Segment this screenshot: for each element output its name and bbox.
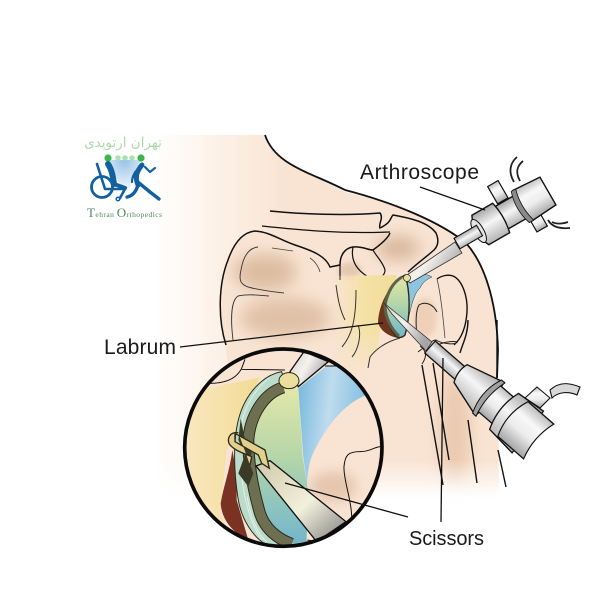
- tear in labrum: [238, 418, 253, 487]
- shoulder arthroscopy illustration: [85, 134, 581, 548]
- magnified inset circle: [180, 343, 387, 550]
- logo dots: [104, 154, 145, 162]
- skin incision around instrument: [418, 340, 458, 364]
- green disk: [251, 385, 307, 544]
- cables: [510, 157, 570, 228]
- fade at bottom of arm: [150, 460, 520, 500]
- logo English name: Tehran Orthopedics: [87, 205, 162, 220]
- scissors cable: [550, 384, 580, 398]
- label: Scissors: Scissors: [409, 528, 484, 550]
- logo Persian title: تهران ارتوپدی: [84, 135, 162, 151]
- scissors blades: [228, 433, 269, 468]
- humerus margin line: [325, 366, 336, 367]
- green glenoid disk: [385, 275, 409, 337]
- humeral head: [405, 275, 467, 345]
- arthroscope tip: [290, 352, 328, 387]
- capsule fibres: [242, 377, 270, 542]
- blue humeral cartilage: [405, 274, 432, 332]
- yellow glenoid translucent area: [339, 275, 397, 369]
- label: Labrum: Labrum: [104, 336, 176, 359]
- olive band: [248, 387, 292, 544]
- glenoid bone lines: [336, 285, 400, 368]
- leader lines: [180, 187, 485, 522]
- arthroscope: [404, 157, 570, 283]
- scissors shaft: [256, 461, 346, 542]
- maroon labrum tissue: [378, 293, 398, 338]
- logo central glow: [108, 160, 141, 198]
- logo runner figure: [127, 165, 159, 199]
- logo: Tehran Orthopedics: [84, 135, 162, 220]
- olive labrum band: [385, 277, 402, 336]
- scapula bone: [220, 211, 438, 380]
- shoulder skin silhouette: [150, 135, 499, 500]
- scissors side port: [525, 387, 550, 408]
- arm outlines: [422, 320, 506, 487]
- yellow bone area: [183, 377, 260, 530]
- scissors instrument: [384, 303, 580, 461]
- arthroscope lens: [279, 373, 299, 389]
- label: Arthroscope: Arthroscope: [360, 161, 479, 184]
- light capsule band: [235, 372, 293, 547]
- logo wheelchair figure: [92, 164, 125, 201]
- maroon tissue: [221, 450, 248, 540]
- humerus shadow: [310, 472, 357, 502]
- skin outlines: [210, 359, 382, 517]
- shaft edge: [307, 540, 312, 541]
- blue cartilage: [298, 366, 367, 487]
